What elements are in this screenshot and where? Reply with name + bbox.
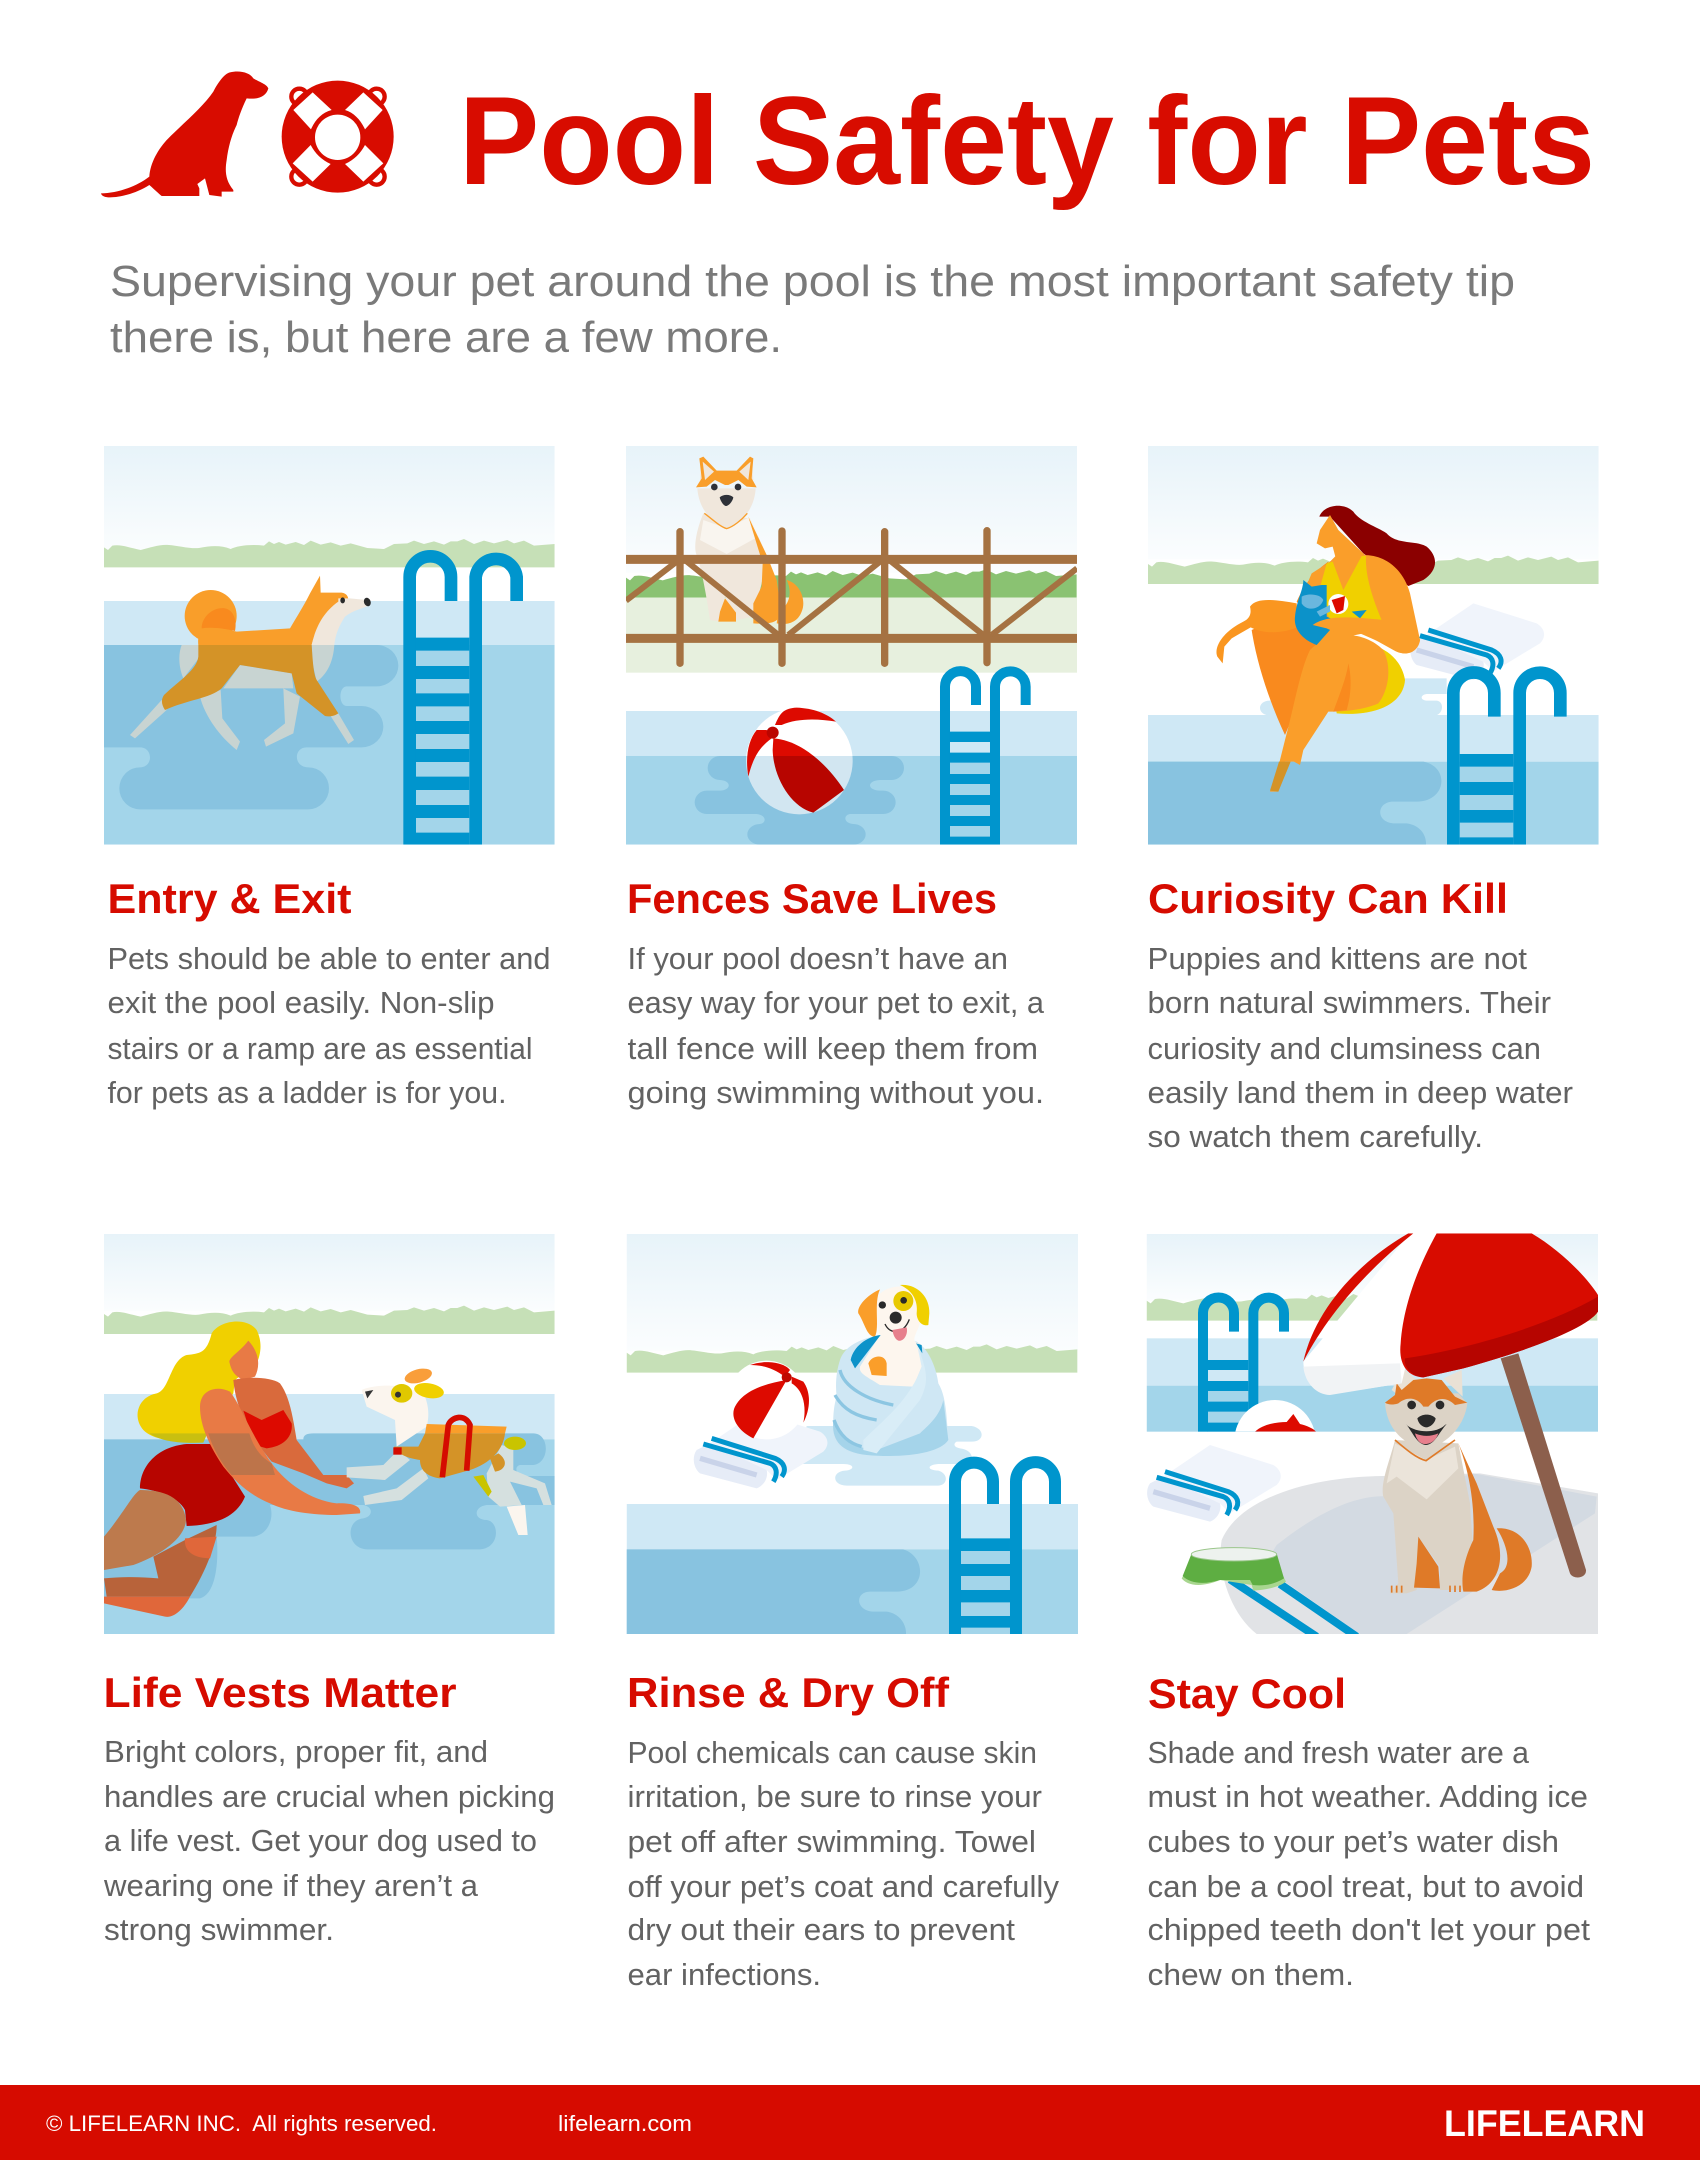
pool ladder [955, 1462, 1055, 1634]
wooden fence [626, 531, 1077, 663]
beach ball [727, 1361, 809, 1439]
subtitle: Supervising your pet around the pool is the most important safety tip [110, 257, 1515, 306]
text: curiosity can kill: curiosity and clumsiness can [1148, 1031, 1541, 1066]
text: stay cool: cubes to your pet’s water dish [1148, 1824, 1559, 1859]
pool ladder [1203, 1297, 1284, 1432]
panel: life vests matter illustration [104, 1234, 555, 1634]
text: stay cool: can be a cool treat, but to avoid [1148, 1869, 1584, 1904]
text: rinse and dry off: ear infections. [628, 1957, 821, 1992]
text: entry and exit [108, 941, 550, 1110]
heading: entry and exit: Entry & Exit [108, 875, 352, 922]
logo: LIFELEARN [1444, 2103, 1645, 2144]
beach ball behind deck [1235, 1400, 1316, 1432]
text: rinse and dry off: off your pet’s coat and carefully [628, 1869, 1059, 1904]
dog in life vest [347, 1366, 552, 1535]
text: entry and exit: stairs or a ramp are as essential [108, 1031, 532, 1066]
text: entry and exit: exit the pool easily. Non-slip [108, 985, 494, 1020]
text: rinse and dry off [628, 1735, 1059, 1992]
panel: fences save lives illustration [626, 446, 1077, 845]
towel [1147, 1445, 1281, 1522]
text: curiosity can kill: Puppies and kittens are not [1148, 941, 1527, 976]
copyright: © LIFELEARN INC. All rights reserved. [46, 2111, 437, 2136]
text: life vests matter: handles are crucial when picking [104, 1779, 555, 1814]
text: curiosity can kill [1148, 941, 1573, 1154]
umbrella pole [1501, 1353, 1586, 1577]
heading: life vests matter: Life Vests Matter [104, 1669, 456, 1716]
text: life vests matter: Bright colors, proper fit, and [104, 1734, 488, 1769]
beach ball [746, 708, 853, 814]
heading: fences save lives: Fences Save Lives [627, 875, 997, 922]
text: life vests matter: wearing one if they aren’t a [103, 1868, 479, 1903]
shadow on deck [1221, 1473, 1598, 1634]
dog behind fence [695, 457, 803, 624]
text: rinse and dry off: Pool chemicals can cause skin [628, 1735, 1037, 1770]
title: Pool Safety for Pets [459, 72, 1595, 211]
blue towel stripes [1230, 1579, 1357, 1637]
text: curiosity can kill: easily land them in deep water [1148, 1075, 1573, 1110]
text: rinse and dry off: dry out their ears to prevent [628, 1912, 1015, 1947]
subtitle [110, 257, 1515, 362]
text: curiosity can kill: so watch them carefully. [1148, 1119, 1483, 1154]
text: curiosity can kill: born natural swimmers. Their [1148, 985, 1551, 1020]
text: life vests matter [103, 1734, 555, 1947]
text: stay cool: chipped teeth don't let your pet [1148, 1912, 1590, 1947]
woman in water [104, 1322, 360, 1617]
panel: stay cool illustration [1147, 1233, 1598, 1637]
shiba dog [1383, 1368, 1532, 1593]
pool ladder [410, 556, 517, 845]
text: stay cool: must in hot weather. Adding ice [1148, 1779, 1588, 1814]
dog wading [130, 576, 372, 750]
text: stay cool: chew on them. [1148, 1957, 1354, 1992]
text: stay cool [1148, 1735, 1590, 1992]
woman holding kitten [1216, 506, 1435, 792]
towel [1410, 603, 1544, 680]
panel: rinse and dry off illustration [627, 1234, 1078, 1634]
heading: stay cool: Stay Cool [1148, 1670, 1346, 1717]
footer bar [0, 2085, 1700, 2160]
text: stay cool: Shade and fresh water are a [1148, 1735, 1530, 1770]
text: entry and exit: for pets as a ladder is for you. [108, 1075, 506, 1110]
text: life vests matter: strong swimmer. [104, 1912, 334, 1947]
panel: curiosity can kill illustration [1148, 446, 1599, 845]
towel [694, 1424, 828, 1488]
text: entry and exit: Pets should be able to enter and [108, 941, 550, 976]
text: fences save lives: If your pool doesn’t have an [628, 941, 1008, 976]
text: fences save lives: going swimming without you. [628, 1075, 1044, 1110]
water puddle [797, 1426, 982, 1486]
text: life vests matter: a life vest. Get your dog used to [104, 1823, 537, 1858]
text: rinse and dry off: pet off after swimming. Towel [628, 1824, 1036, 1859]
pool ladder [1453, 672, 1560, 845]
website: lifelearn.com [558, 2111, 692, 2136]
text: fences save lives: easy way for your pet to exit, a [628, 985, 1045, 1020]
umbrella [1303, 1233, 1598, 1395]
pool ladder [945, 671, 1026, 845]
text: fences save lives: tall fence will keep them from [628, 1031, 1038, 1066]
heading: rinse and dry off: Rinse & Dry Off [627, 1669, 950, 1716]
text: rinse and dry off: irritation, be sure to rinse your [628, 1779, 1042, 1814]
subtitle: there is, but here are a few more. [110, 313, 782, 362]
dog wrapped in towel [833, 1285, 948, 1456]
header icon: sitting dog silhouette [101, 71, 268, 197]
header icon: life ring [282, 81, 394, 193]
panel: entry and exit illustration [104, 446, 555, 845]
heading: curiosity can kill: Curiosity Can Kill [1148, 875, 1508, 922]
water bowl [1182, 1548, 1286, 1591]
text: fences save lives [628, 941, 1045, 1110]
